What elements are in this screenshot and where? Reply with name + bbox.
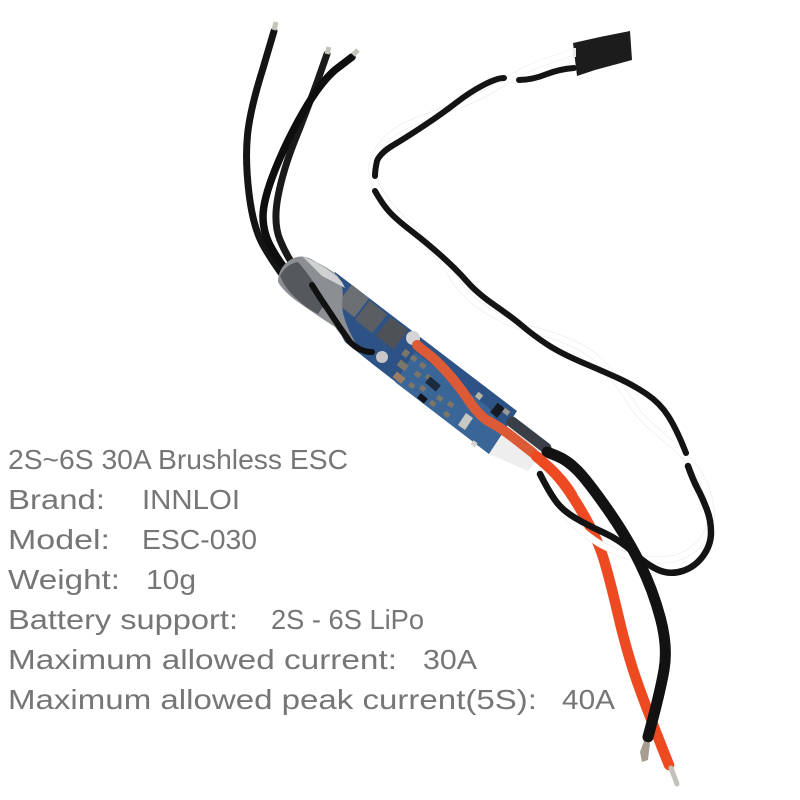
- solder joint: power wire: [406, 331, 420, 345]
- black power wire: [547, 452, 665, 737]
- pale pad: [458, 413, 473, 430]
- weight: Weight:: [8, 564, 120, 595]
- solder joint: motor wire: [376, 351, 388, 363]
- motor wires: [247, 31, 352, 285]
- transistor: [490, 403, 505, 418]
- motor wire 1: [247, 31, 290, 285]
- red battery wire on board: [417, 345, 533, 453]
- signal cable: white wire: [372, 52, 711, 560]
- battery support: 2S - 6S LiPo: [271, 604, 424, 635]
- MOSFET 1: [337, 285, 369, 317]
- bare wire end: black: [640, 741, 650, 762]
- heat shrink shadow: [280, 262, 326, 314]
- motor wire 3: [263, 57, 352, 278]
- bare wire end: red: [671, 768, 677, 784]
- weight: 10g: [146, 564, 196, 595]
- model: [8, 524, 257, 555]
- signal cable: black wire, upper run: [375, 78, 504, 176]
- ESC board: [278, 256, 548, 471]
- MOSFET 3: [376, 317, 408, 349]
- motor wire tips: [274, 22, 358, 55]
- small black IC: [417, 393, 428, 404]
- signal cable: black wire, lower loop: [540, 466, 711, 573]
- maximum allowed current: Maximum allowed current:: [8, 644, 397, 675]
- maximum allowed current: [8, 644, 477, 675]
- battery support: Battery support:: [8, 604, 238, 635]
- lower red power wire: [548, 466, 669, 765]
- brand: Brand:: [8, 484, 105, 515]
- red wire leaving sleeve: [536, 456, 572, 495]
- heat shrink highlight: [302, 256, 345, 288]
- specification text: [8, 444, 615, 715]
- motor wire 2: [276, 54, 327, 272]
- PCB: [322, 272, 517, 454]
- battery support: [8, 604, 424, 635]
- surface-mount components: [393, 349, 510, 447]
- PCB lower lighter band: [395, 352, 502, 454]
- clear sleeve at power end: [489, 416, 548, 471]
- brand: INNLOI: [142, 484, 240, 515]
- model: Model:: [8, 524, 110, 555]
- signal cable: black wire near connector: [519, 68, 574, 80]
- weight: [8, 564, 196, 595]
- MOSFET 2: [355, 301, 387, 333]
- IC chip: [425, 376, 441, 392]
- dark cable in sleeve: [512, 422, 546, 448]
- signal connector: [573, 31, 632, 76]
- signal cable: black wire, middle run: [375, 191, 686, 453]
- title: 2S~6S 30A Brushless ESC: 2S~6S 30A Brushless ESC: [8, 444, 348, 475]
- maximum allowed peak current: Maximum allowed peak current(5S):: [8, 684, 537, 715]
- heat shrink at motor end: [278, 256, 362, 354]
- brand: [8, 484, 240, 515]
- model: ESC-030: [142, 524, 257, 555]
- black motor wire loop: [312, 285, 372, 352]
- maximum allowed current: 30A: [423, 644, 477, 675]
- maximum allowed peak current: 40A: [562, 684, 615, 715]
